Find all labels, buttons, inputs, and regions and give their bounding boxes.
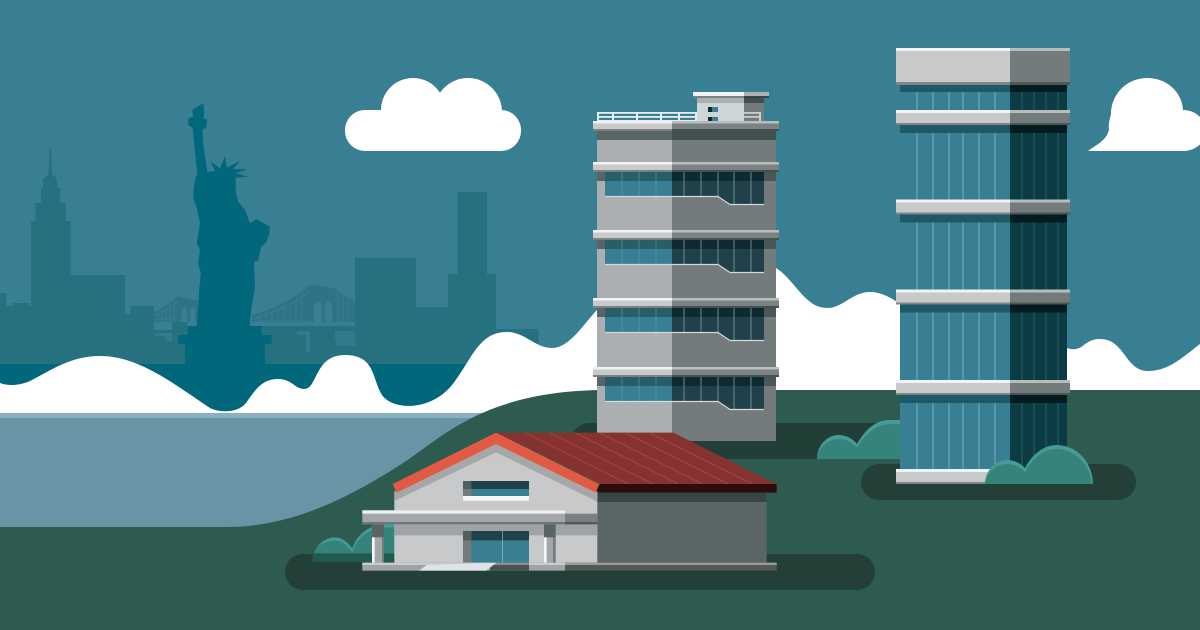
- left column: [372, 524, 384, 563]
- roof railing: [597, 112, 761, 122]
- gable eave shadow: [394, 444, 597, 502]
- bridge: right span: [252, 285, 355, 322]
- tower slab 3: [896, 290, 1070, 312]
- bush: left of tower: [817, 420, 905, 459]
- front steps: [419, 563, 497, 571]
- right column: [544, 524, 556, 563]
- gable window: [463, 481, 529, 501]
- ground shadow: mid building: [571, 423, 971, 459]
- mid-rise building: [593, 92, 779, 441]
- tower slab 2: [896, 200, 1070, 222]
- porch shadow on wall: [394, 524, 597, 535]
- tower glass: [900, 84, 1067, 472]
- top block: [896, 48, 1070, 85]
- bush: front of tower: [985, 445, 1093, 484]
- ground shadow: tower: [861, 464, 1136, 500]
- gable wall: [394, 444, 597, 563]
- wall: lit side: [597, 130, 672, 441]
- skyline gaps: [155, 331, 355, 352]
- floor 3 windows: [593, 298, 779, 340]
- door: [463, 531, 529, 563]
- bay water: [0, 413, 500, 528]
- side wing wall: [597, 493, 767, 563]
- floor 1 windows: [593, 162, 779, 204]
- roof: [496, 433, 777, 493]
- glass tower: [896, 48, 1070, 484]
- skyline silhouette: [0, 148, 539, 364]
- tower base slab: [896, 469, 996, 484]
- Statue of Liberty silhouette: [178, 103, 272, 420]
- red barge board: [393, 433, 599, 493]
- cloud: centre: [345, 78, 521, 151]
- tower slab 4: [896, 380, 1070, 403]
- teal water band: [0, 364, 480, 414]
- ground shadow: house: [285, 554, 875, 590]
- porch beam: [362, 510, 597, 524]
- cloud: right: [1088, 78, 1200, 151]
- penthouse: [693, 92, 769, 122]
- wall: shaded side: [672, 130, 776, 441]
- white cloud wave: [0, 268, 1200, 413]
- roof slab: [593, 121, 779, 140]
- tower slab 1: [896, 110, 1070, 133]
- floor 2 windows: [593, 230, 779, 272]
- house: [313, 433, 777, 571]
- bridge: left span: [154, 296, 198, 322]
- floor 4 windows: [593, 367, 779, 410]
- green ground and hill: [0, 390, 1200, 630]
- plinth: [362, 563, 777, 571]
- bush behind porch: [313, 524, 397, 562]
